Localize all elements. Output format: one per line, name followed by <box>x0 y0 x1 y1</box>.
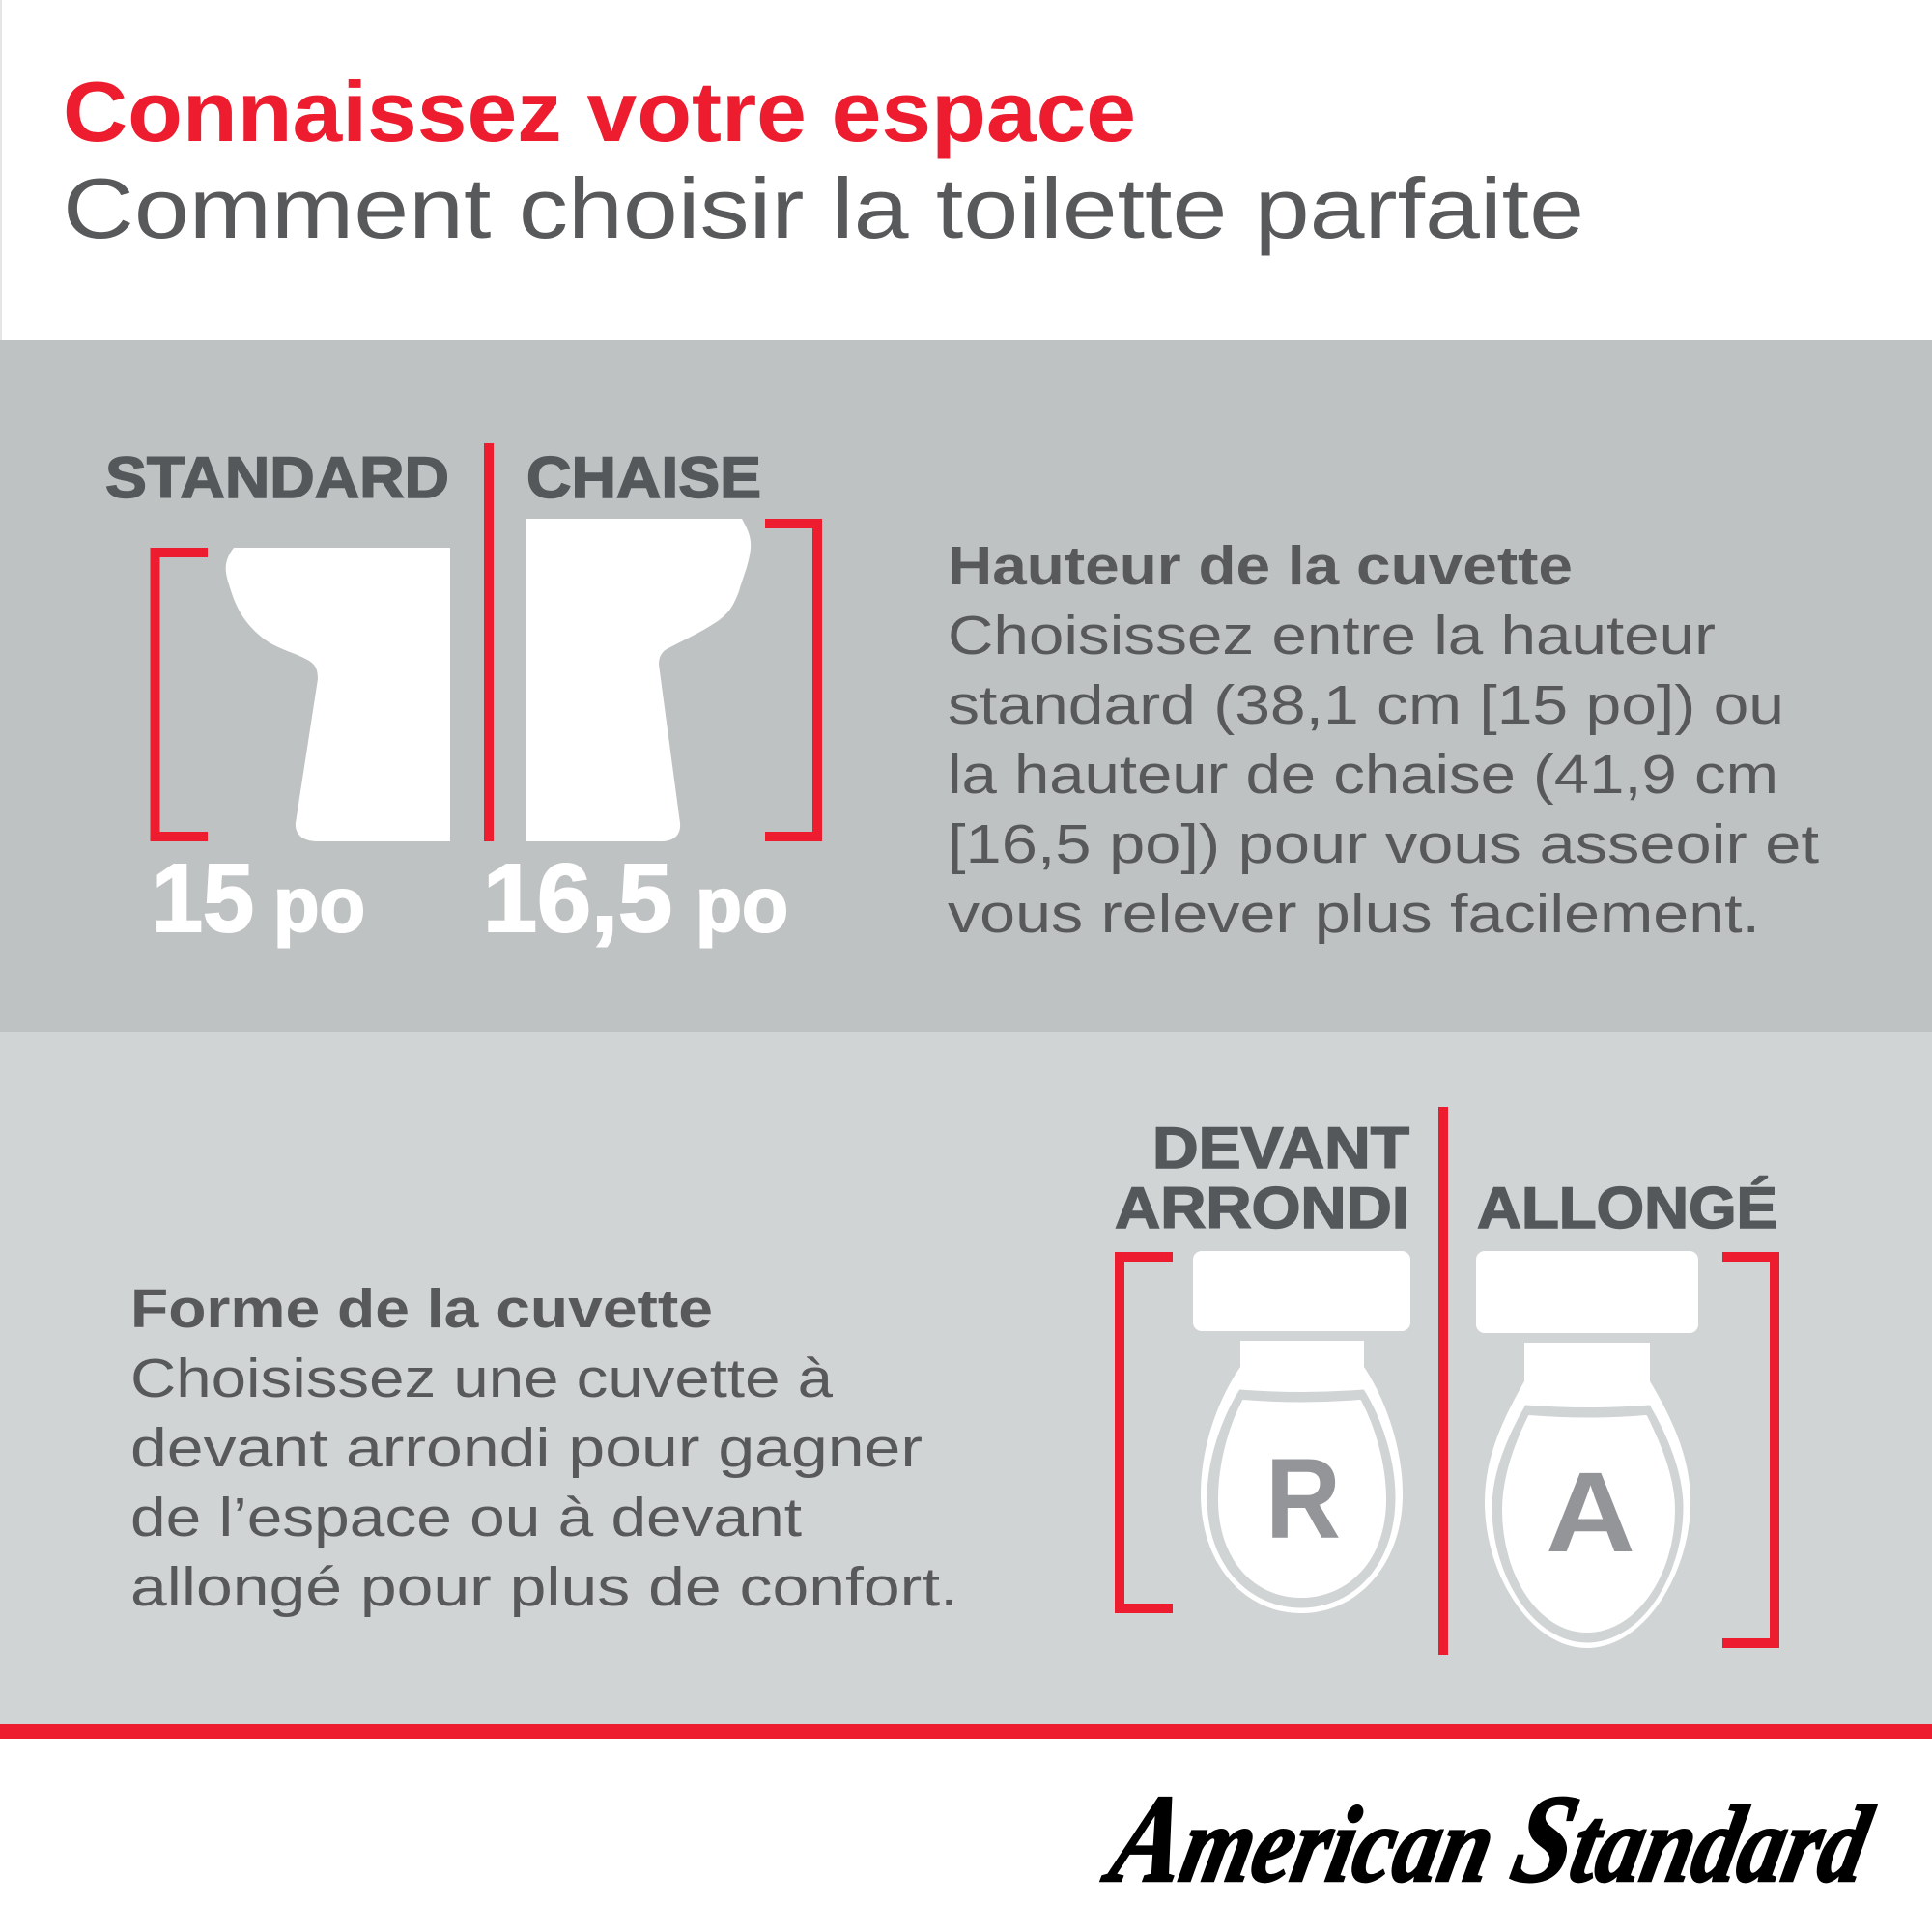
label: devant arrondi: DEVANT <box>1152 1116 1409 1180</box>
value: 15 po: 15 <box>152 844 254 952</box>
panel: forme de la cuvette <box>0 1032 1932 1724</box>
bracket: chair height <box>765 524 817 837</box>
bracket: standard height <box>155 553 208 837</box>
value: 15 po <box>152 844 365 952</box>
text block: forme: allongé pour plus de confort. <box>130 1556 958 1618</box>
icon: standard toilet profile <box>226 548 450 841</box>
label: devant arrondi: ARRONDI <box>1115 1176 1409 1240</box>
text block: hauteur: standard (38,1 cm [15 po]) ou <box>948 674 1784 736</box>
text block: hauteur: vous relever plus facilement. <box>948 883 1760 945</box>
label: chaise: CHAISE <box>526 445 761 510</box>
text block: forme: Choisissez une cuvette à <box>130 1348 833 1409</box>
icon: round toilet top view <box>1193 1251 1410 1613</box>
icon: round toilet top view: R <box>1265 1435 1341 1563</box>
icon: chair height toilet profile <box>526 519 751 841</box>
text block: hauteur: [16,5 po]) pour vous asseoir et <box>948 813 1819 875</box>
title <box>63 64 1584 256</box>
text block: hauteur <box>948 535 1819 945</box>
text block: hauteur: Choisissez entre la hauteur <box>948 605 1716 667</box>
footer rule <box>0 1724 1932 1739</box>
value: 16,5 po: 16,5 <box>483 844 672 952</box>
value: 16,5 po <box>483 844 788 952</box>
panel: hauteur de la cuvette <box>0 340 1932 1032</box>
bracket: round <box>1120 1257 1173 1608</box>
label: standard: STANDARD <box>105 445 449 510</box>
value: 16,5 po: po <box>696 862 788 948</box>
text block: hauteur: Hauteur de la cuvette <box>948 535 1573 597</box>
value: 15 po: po <box>273 862 365 948</box>
icon: elongated toilet top view: A <box>1546 1449 1635 1577</box>
title: Comment choisir la toilette parfaite <box>63 160 1584 256</box>
text block: forme: de l’espace ou à devant <box>130 1487 802 1548</box>
label: devant arrondi <box>1115 1116 1409 1240</box>
divider <box>1438 1107 1448 1655</box>
text block: forme <box>130 1278 958 1618</box>
divider <box>484 443 494 841</box>
icon: elongated toilet top view <box>1476 1251 1698 1648</box>
title: Connaissez votre espace <box>63 64 1136 159</box>
bracket: elongated <box>1722 1257 1775 1643</box>
text block: hauteur: la hauteur de chaise (41,9 cm <box>948 744 1778 806</box>
label: allongé: ALLONGÉ <box>1477 1176 1777 1240</box>
text block: forme: Forme de la cuvette <box>130 1278 713 1340</box>
text block: forme: devant arrondi pour gagner <box>130 1417 923 1479</box>
logo: American Standard: American Standard <box>1094 1770 1885 1909</box>
